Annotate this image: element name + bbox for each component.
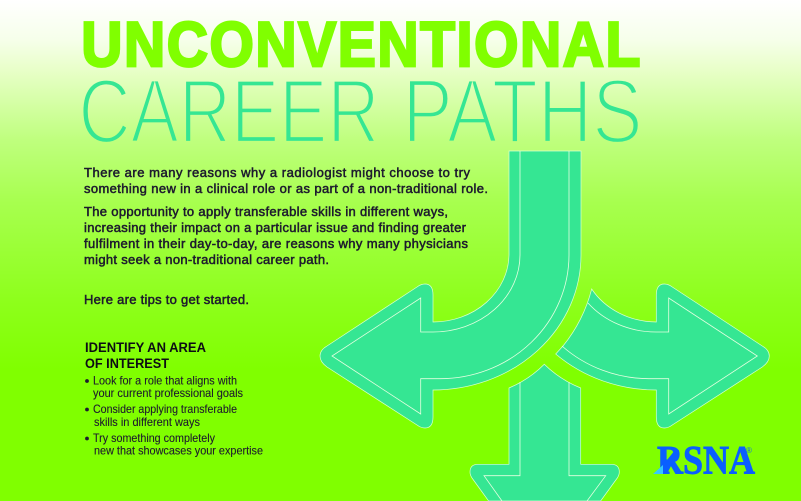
bullet 1: Look for a role that aligns with	[93, 374, 237, 388]
logo: RSNA	[653, 438, 755, 482]
intro paragraph 2: might seek a non-traditional career path.	[84, 252, 329, 267]
bullet 3	[85, 431, 263, 458]
title	[78, 9, 642, 163]
logo diagonal slash	[663, 450, 679, 474]
bullet 3: Try something completely	[93, 431, 215, 445]
intro paragraph 2: increasing their impact on a particular issue and finding greater	[84, 220, 467, 235]
bullet 2: Consider applying transferable	[93, 402, 237, 416]
bullet 3: new that showcases your expertise	[94, 444, 263, 458]
intro paragraph 2: fulfilment in their day-to-day, are reasons why many physicians	[84, 236, 468, 251]
section heading: IDENTIFY AN AREA	[85, 340, 206, 355]
title line: career paths: PATHS	[402, 62, 642, 163]
intro text	[84, 165, 488, 307]
title line: unconventional: UNCONVENTIONAL	[81, 9, 642, 80]
arrow: right	[556, 284, 769, 428]
intro paragraph 1: something new in a clinical role or as part of a non-traditional role.	[84, 181, 488, 196]
arrow: down	[470, 364, 619, 501]
title line: career paths: CAREER	[78, 62, 380, 163]
bullet 2	[85, 402, 237, 429]
background gradient fade	[0, 0, 801, 370]
bullet 2: skills in different ways	[94, 415, 200, 429]
intro paragraph 1: There are many reasons why a radiologist might choose to try	[84, 165, 470, 180]
bullet 1	[85, 374, 243, 400]
tips lead-in: Here are tips to get started.	[84, 292, 249, 307]
section heading	[85, 340, 206, 371]
section heading: OF INTEREST	[85, 356, 170, 371]
diverging arrows	[320, 151, 769, 501]
intro paragraph 2	[84, 204, 468, 267]
logo wordmark: RSNA	[657, 438, 755, 482]
logo registered mark: ®	[746, 446, 752, 455]
arrow: stem turning left	[320, 151, 581, 428]
intro paragraph 2: The opportunity to apply transferable skills in different ways,	[84, 204, 448, 219]
title line: career paths	[78, 62, 642, 163]
section: identify an area of interest	[85, 340, 263, 458]
bullet 1: your current professional goals	[93, 386, 243, 400]
intro paragraph 1	[84, 165, 488, 196]
logo accent triangle	[653, 465, 663, 474]
